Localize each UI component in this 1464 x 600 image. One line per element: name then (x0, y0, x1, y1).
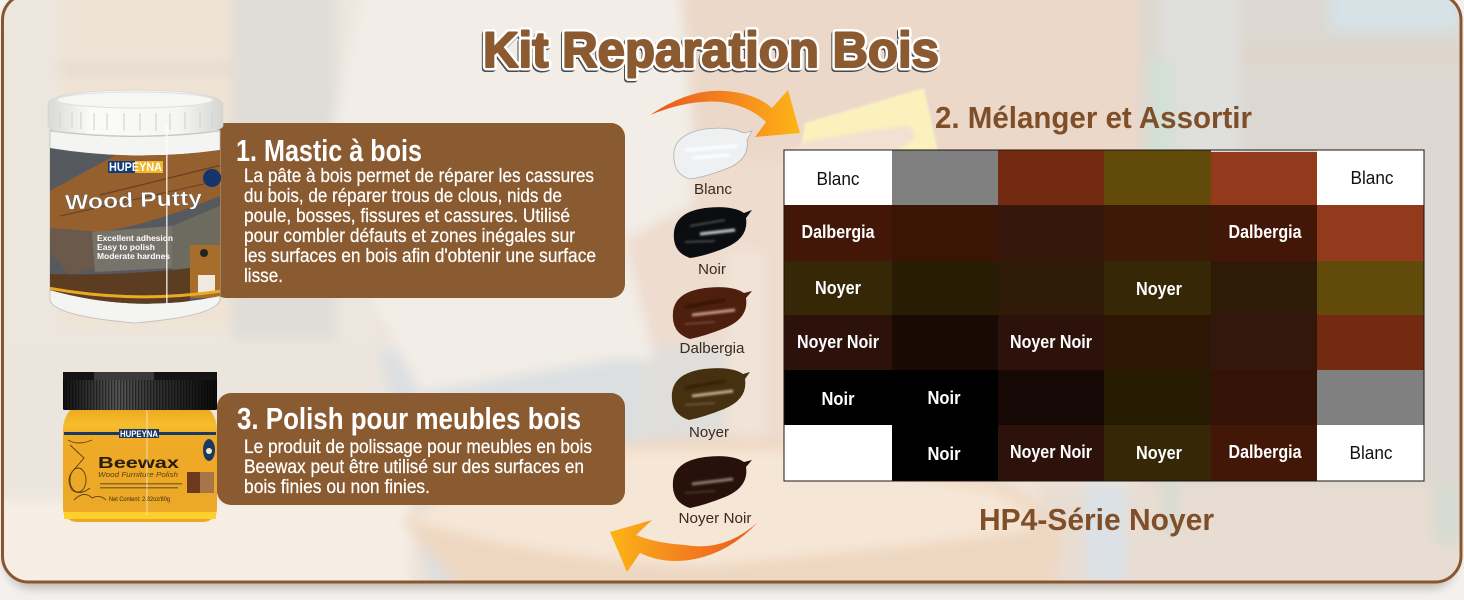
table labels: Noir (928, 387, 960, 408)
swatch: Blanc (674, 128, 752, 198)
title: Kit Reparation Bois (482, 24, 938, 80)
product: beewax jar: Wood Furniture Polish (98, 470, 178, 479)
swatch: Dalbergia: Dalbergia (680, 341, 745, 357)
colour mixing table (784, 150, 1424, 481)
table labels: Noyer Noir (1010, 441, 1092, 462)
product: beewax jar (63, 372, 217, 522)
swatch: Noyer Noir: Noyer Noir (678, 511, 752, 527)
arrow: bottom (610, 520, 758, 572)
title: Kit Reparation Bois (483, 22, 939, 78)
heading: 1. Mastic a bois: 1. Mastic à bois (236, 133, 422, 168)
swatch: Noir: Noir (698, 262, 726, 278)
table labels: Blanc (1350, 167, 1394, 188)
body text: polish (244, 436, 592, 498)
product: wood putty jar (48, 90, 223, 323)
sponge in background (800, 88, 938, 152)
panel: mastic a bois (212, 123, 625, 298)
body text: mastic (244, 165, 596, 287)
table labels: Noyer (1136, 442, 1182, 463)
body text: polish: bois finies ou non finies. (244, 476, 430, 498)
swatch: Dalbergia (673, 287, 752, 357)
table labels: Noyer (815, 277, 861, 298)
body text: mastic: du bois, de réparer trous de clous, nids de (244, 185, 562, 207)
table labels: Blanc (1350, 442, 1392, 463)
product: beewax jar: HUPEYNA (120, 429, 158, 439)
swatch: Noir (674, 207, 752, 278)
panel: polish (217, 393, 625, 505)
heading: 2. Melanger et Assortir: 2. Mélanger et Assortir (935, 100, 1252, 135)
body text: polish: Le produit de polissage pour meubles en bois (244, 436, 592, 458)
table labels: Dalbergia (1228, 441, 1302, 462)
table labels: Blanc (816, 168, 860, 189)
product: wood putty jar: Easy to polish (97, 242, 155, 252)
table labels: Noyer (1136, 278, 1182, 299)
table labels: Dalbergia (1228, 221, 1302, 242)
product: wood putty jar: Moderate hardnes (97, 251, 170, 261)
table labels: Noir (822, 388, 854, 409)
swatch: Noyer (672, 368, 750, 441)
swatch: Blanc: Blanc (694, 182, 732, 198)
product: beewax jar: Beewax (98, 455, 180, 472)
table labels: Noyer Noir (1010, 331, 1092, 352)
title: Kit Reparation Bois (483, 22, 939, 78)
product: wood putty jar: Excellent adhesion (97, 233, 173, 243)
body text: polish: Beewax peut être utilisé sur des surfaces en (244, 456, 584, 478)
table labels: Noir (928, 443, 960, 464)
swatch: Noyer: Noyer (689, 425, 729, 441)
product: wood putty jar: Wood Putty (65, 187, 203, 214)
table labels: Dalbergia (802, 221, 875, 242)
arrow: top (650, 90, 800, 137)
product: wood putty jar: HUPEYNA (109, 160, 162, 174)
hand in background (798, 126, 915, 150)
body text: mastic: lisse. (244, 265, 283, 287)
heading: 3. Polish pour meubles bois: 3. Polish pour meubles bois (237, 401, 581, 436)
swatch: Noyer Noir (673, 456, 752, 527)
table labels: Noyer Noir (797, 331, 879, 352)
body text: mastic: pour combler défauts et zones inégales sur (244, 225, 575, 247)
body text: mastic: La pâte à bois permet de réparer les cassures (244, 165, 594, 187)
heading: HP4-Serie Noyer: HP4-Série Noyer (979, 502, 1214, 537)
body text: mastic: les surfaces en bois afin d'obtenir une surface (244, 245, 596, 267)
body text: mastic: poule, bosses, fissures et cassures. Utilisé (244, 205, 570, 227)
product: beewax jar: Net Content: 2.82oz/80g (109, 496, 170, 503)
paint swatches (672, 128, 752, 527)
table labels (797, 167, 1394, 464)
